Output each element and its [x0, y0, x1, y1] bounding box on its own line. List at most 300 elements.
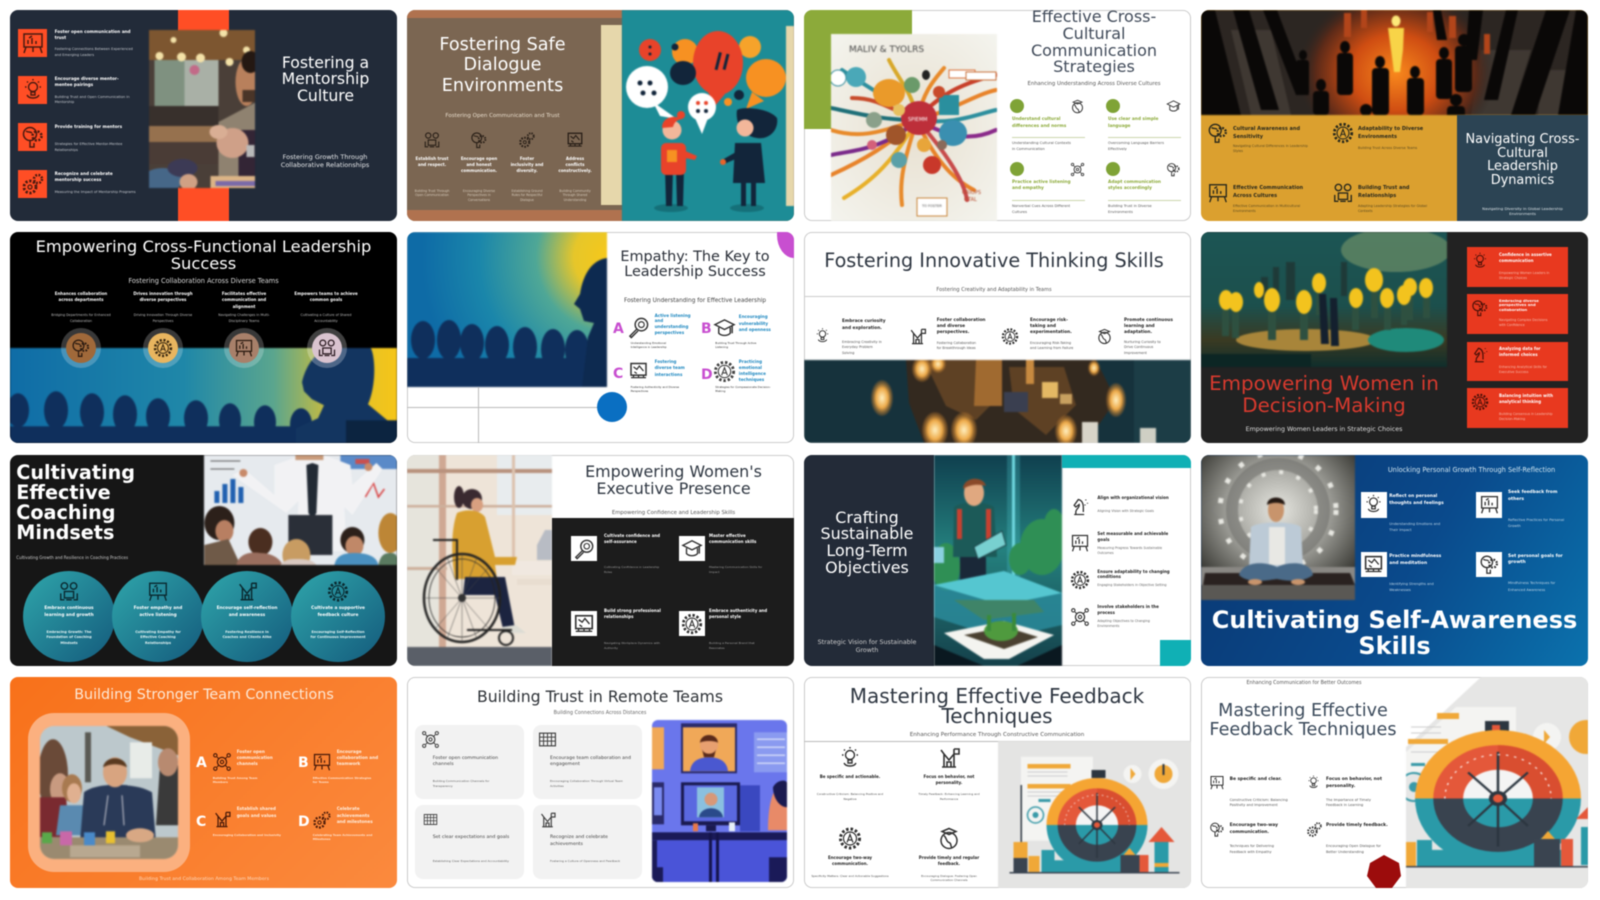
- subtitle: Enhancing Understanding Across Diverse Cultures: [1028, 81, 1160, 87]
- icon tile: [679, 611, 705, 636]
- item text: Aligning Vision with Strategic Goals: [1097, 509, 1154, 513]
- item text: Contexts: [1358, 208, 1373, 212]
- item heading: [1499, 346, 1540, 357]
- item heading: diverse team: [655, 365, 685, 370]
- item text: [213, 777, 257, 785]
- title: [282, 53, 370, 105]
- item heading: thoughts and feelings: [1389, 501, 1444, 506]
- item text: Authority: [604, 646, 618, 650]
- icon: board: [1363, 554, 1384, 575]
- item text: Transparency: [433, 784, 453, 788]
- image: coach at whiteboard with audience: [204, 455, 397, 565]
- item heading: [1508, 554, 1563, 567]
- item heading: Establish shared: [237, 806, 276, 811]
- item heading: Active listening: [655, 313, 691, 318]
- item text: Relationships: [55, 148, 78, 152]
- item heading: [1097, 604, 1159, 616]
- image: colourful mind map: MALIV & TYOLRS: [849, 45, 924, 55]
- panel: Mastering Effective Feedback Techniques (grid layout): [804, 677, 1191, 888]
- item heading: Build strong professional: [604, 608, 661, 613]
- item text: Understanding Cultural Contexts: [1012, 141, 1071, 145]
- item text: Empowering Women Leaders in: [1499, 271, 1549, 275]
- title: Strategies: [1053, 57, 1135, 76]
- item text: Understanding Emotional: [631, 341, 666, 345]
- item heading: Foster empathy and: [134, 606, 182, 611]
- item text: Decision-Making: [1499, 417, 1525, 421]
- icon: network: [1069, 607, 1091, 627]
- icon tile: [679, 536, 705, 561]
- item heading: Encourage risk-: [1030, 318, 1068, 323]
- item heading: Provide training for mentors: [55, 124, 122, 129]
- item text: [23, 630, 115, 646]
- item heading: Reflect on personal: [1389, 494, 1437, 499]
- icon: gears: [1306, 821, 1323, 838]
- item text: Encouraging Collaboration and Inclusivity: [213, 833, 281, 837]
- item heading: relationships: [604, 614, 633, 619]
- divider: [804, 295, 1191, 298]
- item text: Encouraging Risk-Taking: [1030, 340, 1071, 344]
- title: Empowering Cross-Functional Leadership: [36, 237, 371, 256]
- item heading: mentee pairings: [55, 82, 93, 87]
- item text: [1230, 844, 1274, 855]
- item text: Building Trust and Open Communication in: [55, 94, 130, 98]
- icon: chess: [1471, 346, 1489, 364]
- dark side panel: [1457, 115, 1588, 221]
- title: Skills: [1358, 632, 1431, 660]
- item heading: feedback.: [938, 861, 960, 866]
- item text: Conversations: [468, 198, 490, 202]
- item heading: Understand cultural: [1012, 117, 1060, 122]
- item heading: collaboration and: [337, 755, 378, 760]
- item text: Accountability: [314, 319, 338, 323]
- item heading: personal style: [709, 614, 741, 619]
- item heading: vulnerability: [739, 321, 768, 326]
- icon: globe cap: [937, 826, 961, 851]
- icon: brain: [1166, 162, 1180, 178]
- item heading: Building Trust and: [1358, 185, 1409, 191]
- item text: Executive Success: [1499, 370, 1528, 374]
- item text: Fostering Connections Between Experienced: [55, 47, 133, 51]
- item text: [54, 47, 134, 57]
- item heading: Be specific and clear.: [1230, 777, 1282, 782]
- item heading: Foster open communication: [433, 756, 498, 761]
- item heading: active listening: [139, 613, 177, 618]
- title: [1201, 608, 1588, 660]
- item text: Constructive Criticism: Balancing Positive and: [817, 792, 883, 796]
- item text: Making: [715, 389, 725, 393]
- item heading: [1108, 116, 1159, 129]
- letter B: B: [701, 321, 712, 337]
- icon: magnifier: [627, 316, 650, 339]
- item text: Everyday Problem: [842, 345, 873, 349]
- item heading: [460, 156, 498, 173]
- item heading: [810, 855, 890, 867]
- item heading: [23, 606, 115, 620]
- item text: [1030, 340, 1073, 352]
- item text: Effectively: [1108, 147, 1127, 151]
- item text: Building a Personal Brand that: [709, 641, 755, 645]
- item heading: Recognize and celebrate: [55, 171, 113, 176]
- item heading: interactions: [655, 372, 682, 377]
- divider: [1108, 199, 1181, 202]
- icon: gear: [838, 826, 862, 851]
- subtitle: Enhancing Performance Through Constructive Communication: [910, 732, 1084, 738]
- item heading: [909, 774, 989, 786]
- item heading: self-assurance: [604, 539, 637, 544]
- icon: thumbs: [908, 327, 927, 346]
- item heading: Environments: [1358, 134, 1397, 140]
- icon: arrow badge: [1106, 162, 1120, 176]
- item heading: feedback culture: [318, 613, 358, 618]
- item text: Improvement: [1124, 351, 1147, 355]
- item heading: adaptation.: [1124, 330, 1152, 335]
- item text: Constructive Criticism: Balancing: [1230, 798, 1288, 802]
- decoration: purple corner: [777, 212, 811, 258]
- card: [1467, 342, 1568, 381]
- item heading: Foster open: [237, 748, 265, 754]
- item heading: communication.: [461, 168, 497, 173]
- divider: [1012, 136, 1085, 139]
- item heading: [1499, 393, 1553, 404]
- item heading: Align with organizational vision: [1097, 495, 1169, 500]
- item heading: Cultural Awareness and: [1233, 126, 1300, 132]
- icon: team: [424, 132, 440, 148]
- item heading: Encouraging: [739, 314, 768, 319]
- photo: mentor conversation: [148, 28, 256, 190]
- item heading: goals: [1097, 537, 1109, 542]
- top teal band: [1062, 455, 1191, 468]
- card: [1467, 388, 1568, 428]
- item text: [414, 189, 450, 197]
- item text: Fostering Authenticity and Diverse: [631, 385, 679, 389]
- item heading: Focus on behavior, not: [924, 774, 974, 779]
- item heading: [1012, 178, 1071, 191]
- image: colourful mind map: TO FOSTER: [921, 204, 942, 208]
- icon: network: [421, 730, 440, 749]
- item text: [559, 189, 591, 202]
- item text: [123, 313, 203, 325]
- item text: Building Trust Across Diverse Teams: [1358, 146, 1417, 150]
- subtitle: [1457, 206, 1588, 216]
- item heading: channels: [237, 761, 258, 766]
- item heading: Confidence in assertive: [1499, 252, 1552, 257]
- item text: Encouraging Diverse: [463, 189, 495, 193]
- item text: Building Communication Channels for: [433, 779, 489, 783]
- item text: Through Shared: [563, 193, 587, 197]
- green accent block: [804, 10, 912, 129]
- icon: grid: [421, 812, 440, 827]
- item text: Driving Innovation Through Diverse: [134, 313, 192, 317]
- item heading: Cultivate confidence and: [604, 533, 660, 538]
- item heading: Provide timely and regular: [919, 855, 979, 860]
- icon: brain: [1471, 299, 1489, 317]
- letter A: A: [196, 755, 207, 771]
- item heading: [1124, 318, 1173, 336]
- item heading: [1389, 494, 1444, 507]
- icon: flags: [236, 580, 258, 603]
- item heading: [415, 156, 449, 168]
- panel: Empowering Women's Executive Presence: [407, 455, 794, 666]
- item heading: Sensitivity: [1233, 134, 1263, 140]
- item heading: [54, 28, 131, 40]
- item text: [709, 641, 755, 651]
- icon: brain: [470, 132, 487, 149]
- item text: [1012, 204, 1070, 214]
- image: colourful mind map: [830, 32, 998, 222]
- item heading: Set personal goals for: [1508, 554, 1563, 559]
- letter C: C: [613, 366, 623, 382]
- item heading: differences and norms: [1012, 124, 1066, 129]
- item text: [511, 189, 543, 202]
- item text: Open Communication: [415, 193, 449, 197]
- icon: gear: [713, 360, 736, 383]
- item heading: personality.: [1326, 784, 1355, 789]
- item heading: engagement: [550, 762, 580, 767]
- illustration: two people with speech bubbles: [620, 10, 794, 222]
- item text: Performance: [940, 797, 958, 801]
- icon: bulb: [814, 327, 831, 345]
- item heading: Analyzing data for: [1499, 346, 1540, 351]
- item heading: [1499, 298, 1539, 312]
- title: Mastering Effective: [1218, 700, 1388, 720]
- item text: for Continuous Improvement: [310, 635, 366, 639]
- title: Fostering Innovative Thinking Skills: [824, 249, 1164, 272]
- item heading: mentorship success: [55, 177, 101, 182]
- item text: [286, 313, 366, 325]
- icon: presentation board: [22, 32, 44, 54]
- item text: Effective Coaching: [140, 635, 176, 639]
- item text: [903, 792, 995, 801]
- item heading: [337, 806, 373, 825]
- item text: Their Impact: [1389, 528, 1411, 532]
- item text: [201, 630, 293, 641]
- item text: Building Trust Through: [415, 189, 449, 193]
- item text: Understanding Emotions and: [1389, 522, 1440, 526]
- item heading: achievements: [550, 842, 583, 847]
- item text: Navigating Challenges in Multi-: [218, 313, 270, 317]
- item heading: [1233, 125, 1300, 141]
- panel: Building Stronger Team Connections: [10, 677, 397, 888]
- title: Executive Presence: [596, 479, 751, 498]
- item heading: Cultivate a supportive: [311, 606, 365, 611]
- item text: Celebrating Team Achievements and: [313, 833, 372, 837]
- item heading: Practice mindfulness: [1389, 554, 1441, 559]
- item heading: Celebrate: [337, 806, 360, 811]
- bottom band: [407, 210, 622, 221]
- item text: Cultivating Empathy for: [135, 630, 181, 634]
- item text: [204, 313, 284, 325]
- icon: cap: [1166, 100, 1181, 112]
- item text: Establishing Clear Expectations and Accountability: [433, 859, 509, 863]
- oval card: [23, 571, 115, 662]
- item text: The Importance of Timely: [1326, 798, 1371, 802]
- item text: Environments: [1097, 624, 1119, 628]
- subtitle: Empowering Confidence and Leadership Skills: [612, 510, 735, 516]
- item heading: Embracing diverse: [1499, 298, 1539, 302]
- item text: Navigating Workplace Dynamics with: [604, 641, 660, 645]
- icon: arrow badge: [1106, 99, 1120, 113]
- item heading: Address: [566, 156, 584, 161]
- item text: [1499, 318, 1548, 328]
- item heading: communication.: [832, 861, 868, 866]
- icon: board: [147, 580, 169, 603]
- subtitle: Building Connections Across Distances: [554, 711, 646, 716]
- icon: board: [311, 752, 333, 772]
- item heading: communication: [1499, 258, 1533, 263]
- image: colourful mind map: ORIOPS: [962, 190, 981, 196]
- title: Success: [171, 254, 236, 273]
- item text: [1499, 412, 1553, 422]
- divider: [1012, 199, 1085, 202]
- icon: gears: [22, 173, 44, 196]
- item heading: learning and: [1124, 324, 1155, 329]
- item text: [1508, 517, 1564, 530]
- item heading: across departments: [58, 297, 104, 302]
- item text: Members: [213, 780, 228, 784]
- subtitle: Fostering Open Communication and Trust: [445, 113, 560, 119]
- item heading: [655, 359, 685, 379]
- item heading: [1358, 184, 1409, 200]
- icon: person: [58, 580, 80, 603]
- item heading: and awareness: [229, 613, 265, 618]
- icon: brain: [1478, 554, 1500, 575]
- title: [1201, 373, 1447, 418]
- icon: magnifier: [573, 538, 595, 560]
- item heading: growth: [1508, 560, 1526, 565]
- item text: for Breakthrough Ideas: [937, 346, 976, 350]
- divider: [1108, 136, 1181, 139]
- panel: Fostering a Mentorship Culture: [10, 10, 397, 221]
- item text: Solving: [842, 351, 854, 355]
- item heading: [937, 318, 985, 336]
- item heading: Set clear expectations and goals: [433, 835, 509, 840]
- item text: Outcomes: [1097, 551, 1114, 555]
- icon tile: [571, 536, 597, 561]
- icon: board: [1207, 182, 1229, 204]
- icon tile: [1476, 552, 1502, 577]
- item text: Building Trust Through Active: [715, 341, 756, 345]
- item text: [631, 342, 667, 350]
- title: Crafting: [835, 508, 899, 527]
- item heading: communication and: [222, 297, 266, 302]
- icon: cap: [681, 538, 703, 560]
- item heading: Recognize and celebrate: [550, 835, 608, 840]
- icon: board: [1478, 494, 1500, 515]
- item heading: Foster open communication and: [55, 28, 131, 34]
- panel: Crafting Sustainable Long-Term Objectives: [804, 455, 1191, 666]
- item text: Dialogue: [520, 198, 534, 202]
- item text: and Emerging Leaders: [55, 52, 94, 56]
- item text: [715, 342, 756, 350]
- subtitle: Navigating Diversity in Global Leadership: [1482, 206, 1563, 210]
- item text: Navigating Cultural Differences in Leadership: [1233, 144, 1308, 148]
- title: Cultural: [1497, 146, 1548, 161]
- item text: Strategies for Compassionate Decision-: [715, 385, 771, 389]
- item heading: communication.: [1230, 830, 1269, 835]
- item text: [112, 630, 204, 646]
- photo frame: [28, 713, 190, 872]
- item text: Understanding: [564, 198, 586, 202]
- item heading: Relationships: [1358, 193, 1396, 199]
- item heading: Adaptability to Diverse: [1358, 126, 1423, 132]
- item heading: Involve stakeholders in the: [1097, 604, 1159, 609]
- icon tile: [1361, 552, 1387, 577]
- item text: [313, 777, 371, 785]
- item heading: [237, 748, 273, 768]
- illustration: video call: [652, 720, 787, 882]
- item heading: Encourage two-way: [828, 855, 872, 860]
- icon: chess: [1069, 497, 1091, 517]
- item text: [1326, 844, 1381, 855]
- item text: Relationships: [145, 641, 171, 645]
- item text: [604, 565, 659, 575]
- item heading: Set measurable and achievable: [1097, 531, 1168, 536]
- item text: [1012, 141, 1072, 151]
- item heading: [433, 756, 498, 769]
- title: Effective: [16, 481, 111, 504]
- icon: puzzle: [573, 613, 595, 635]
- item heading: Empowers teams to achieve: [294, 291, 358, 296]
- icon: brain: [1209, 821, 1225, 838]
- item heading: and: [655, 318, 663, 323]
- item heading: styles accordingly: [1108, 186, 1152, 191]
- title: [553, 464, 794, 497]
- bottom teal square: [1160, 640, 1191, 666]
- item text: [291, 630, 385, 641]
- title: Fostering a: [282, 53, 369, 72]
- item heading: [739, 359, 766, 383]
- icon tile: [1476, 492, 1502, 518]
- oval card: [112, 571, 204, 662]
- item text: [1389, 521, 1440, 533]
- item heading: [909, 855, 989, 867]
- item text: Identifying Strengths and: [1389, 582, 1434, 586]
- image: glowing leader among silhouettes: [1201, 10, 1588, 115]
- dark side panel: [804, 455, 934, 666]
- item heading: diverse perspectives: [140, 297, 186, 302]
- item text: Disciplinary Teams: [229, 319, 259, 323]
- title: Dynamics: [1491, 173, 1554, 188]
- icon: gear person: [1069, 570, 1091, 590]
- item heading: Encourage self-reflection: [217, 606, 277, 611]
- title: Mentorship: [282, 69, 369, 88]
- subtitle: Collaborative Relationships: [281, 161, 369, 169]
- item heading: Facilitates effective: [222, 291, 266, 296]
- item text: Listening: [715, 345, 728, 349]
- title: Building Trust in Remote Teams: [477, 687, 723, 706]
- item text: Mentorship: [55, 100, 74, 104]
- icon: network: [211, 752, 233, 772]
- item heading: alignment: [233, 304, 255, 309]
- item heading: [286, 291, 366, 304]
- item heading: Practice active listening: [1012, 180, 1071, 185]
- item heading: inclusivity and: [511, 162, 543, 167]
- subtitle: Fostering Understanding for Effective Leadership: [624, 298, 766, 304]
- item heading: and openness: [739, 327, 771, 332]
- panel: Cultivating Effective Coaching Mindsets: [10, 455, 397, 666]
- icon: brain gear: [71, 338, 91, 358]
- subtitle: Fostering Growth Through: [283, 152, 367, 160]
- item heading: common goals: [310, 297, 342, 302]
- oval card: [291, 571, 385, 662]
- item text: Establishing Ground: [511, 189, 543, 193]
- item text: [1233, 144, 1308, 154]
- item heading: and diverse: [937, 324, 965, 329]
- title: [439, 35, 566, 96]
- item text: Building Consensus in Leadership: [1499, 412, 1553, 416]
- item text: Building Trust Among Team: [213, 776, 257, 780]
- cream strip: [600, 25, 622, 205]
